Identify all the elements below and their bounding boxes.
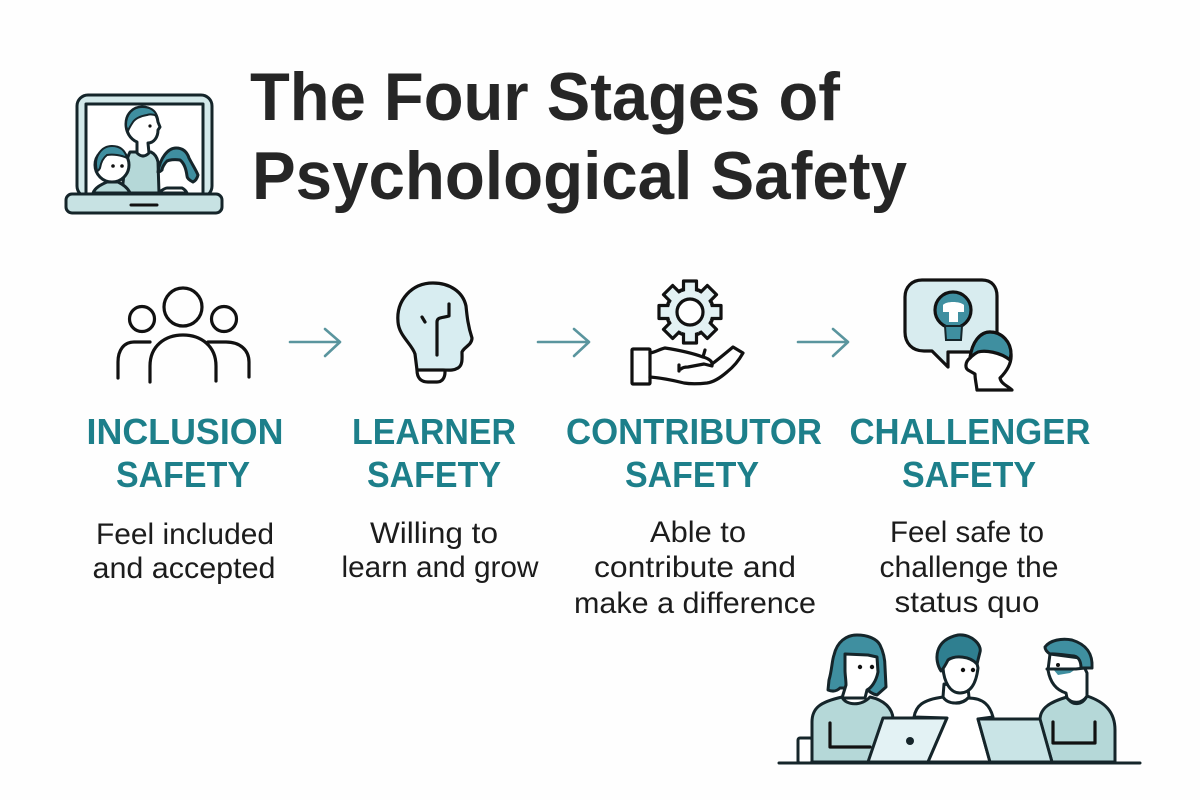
title: The Four Stages of	[250, 59, 840, 135]
text: contributor description: make a difference	[574, 587, 816, 620]
text: contributor description: contribute and	[594, 551, 796, 584]
table line	[779, 762, 1140, 764]
text: inclusion description	[92, 518, 276, 585]
text: challenger description	[880, 516, 1058, 619]
icon: group of people	[118, 288, 249, 382]
arrow 3	[798, 329, 848, 356]
text: inclusion description: and accepted	[92, 552, 276, 585]
heading: contributor safety: SAFETY	[625, 454, 759, 495]
text: challenger description: Feel safe to	[890, 516, 1044, 549]
heading: learner safety: LEARNER	[352, 411, 516, 452]
heading: challenger safety: CHALLENGER	[850, 411, 1090, 452]
text: learner description: Willing to	[370, 517, 498, 550]
heading: challenger safety	[850, 411, 1090, 495]
title	[250, 59, 907, 214]
text: contributor description: Able to	[650, 516, 746, 549]
text: challenger description: challenge the	[880, 551, 1058, 584]
arrow 2	[538, 329, 589, 356]
icon: speech bubble with lightbulb and person	[905, 280, 1012, 390]
icon: laptop with three people	[66, 95, 222, 213]
illustration: team at laptops	[779, 635, 1140, 763]
heading: challenger safety: SAFETY	[902, 454, 1036, 495]
heading: learner safety	[352, 411, 516, 495]
man with glasses and laptop	[978, 639, 1115, 762]
gear	[659, 281, 721, 343]
hand	[632, 347, 743, 384]
heading: learner safety: SAFETY	[367, 454, 501, 495]
heading: inclusion safety	[86, 411, 284, 495]
heading: contributor safety	[566, 411, 822, 495]
text: inclusion description: Feel included	[96, 518, 274, 551]
icon: lightbulb head	[398, 283, 472, 382]
title: Psychological Safety	[252, 138, 907, 214]
woman with laptop	[798, 635, 947, 763]
heading: contributor safety: CONTRIBUTOR	[566, 411, 822, 452]
heading: inclusion safety: INCLUSION	[86, 411, 284, 452]
text: learner description	[342, 517, 539, 584]
heading: inclusion safety: SAFETY	[116, 454, 250, 495]
arrow 1	[290, 329, 340, 356]
text: contributor description	[574, 516, 816, 620]
text: challenger description: status quo	[894, 586, 1040, 619]
man in the centre	[914, 635, 993, 762]
text: learner description: learn and grow	[342, 551, 539, 584]
icon: hand holding gear	[632, 281, 743, 384]
